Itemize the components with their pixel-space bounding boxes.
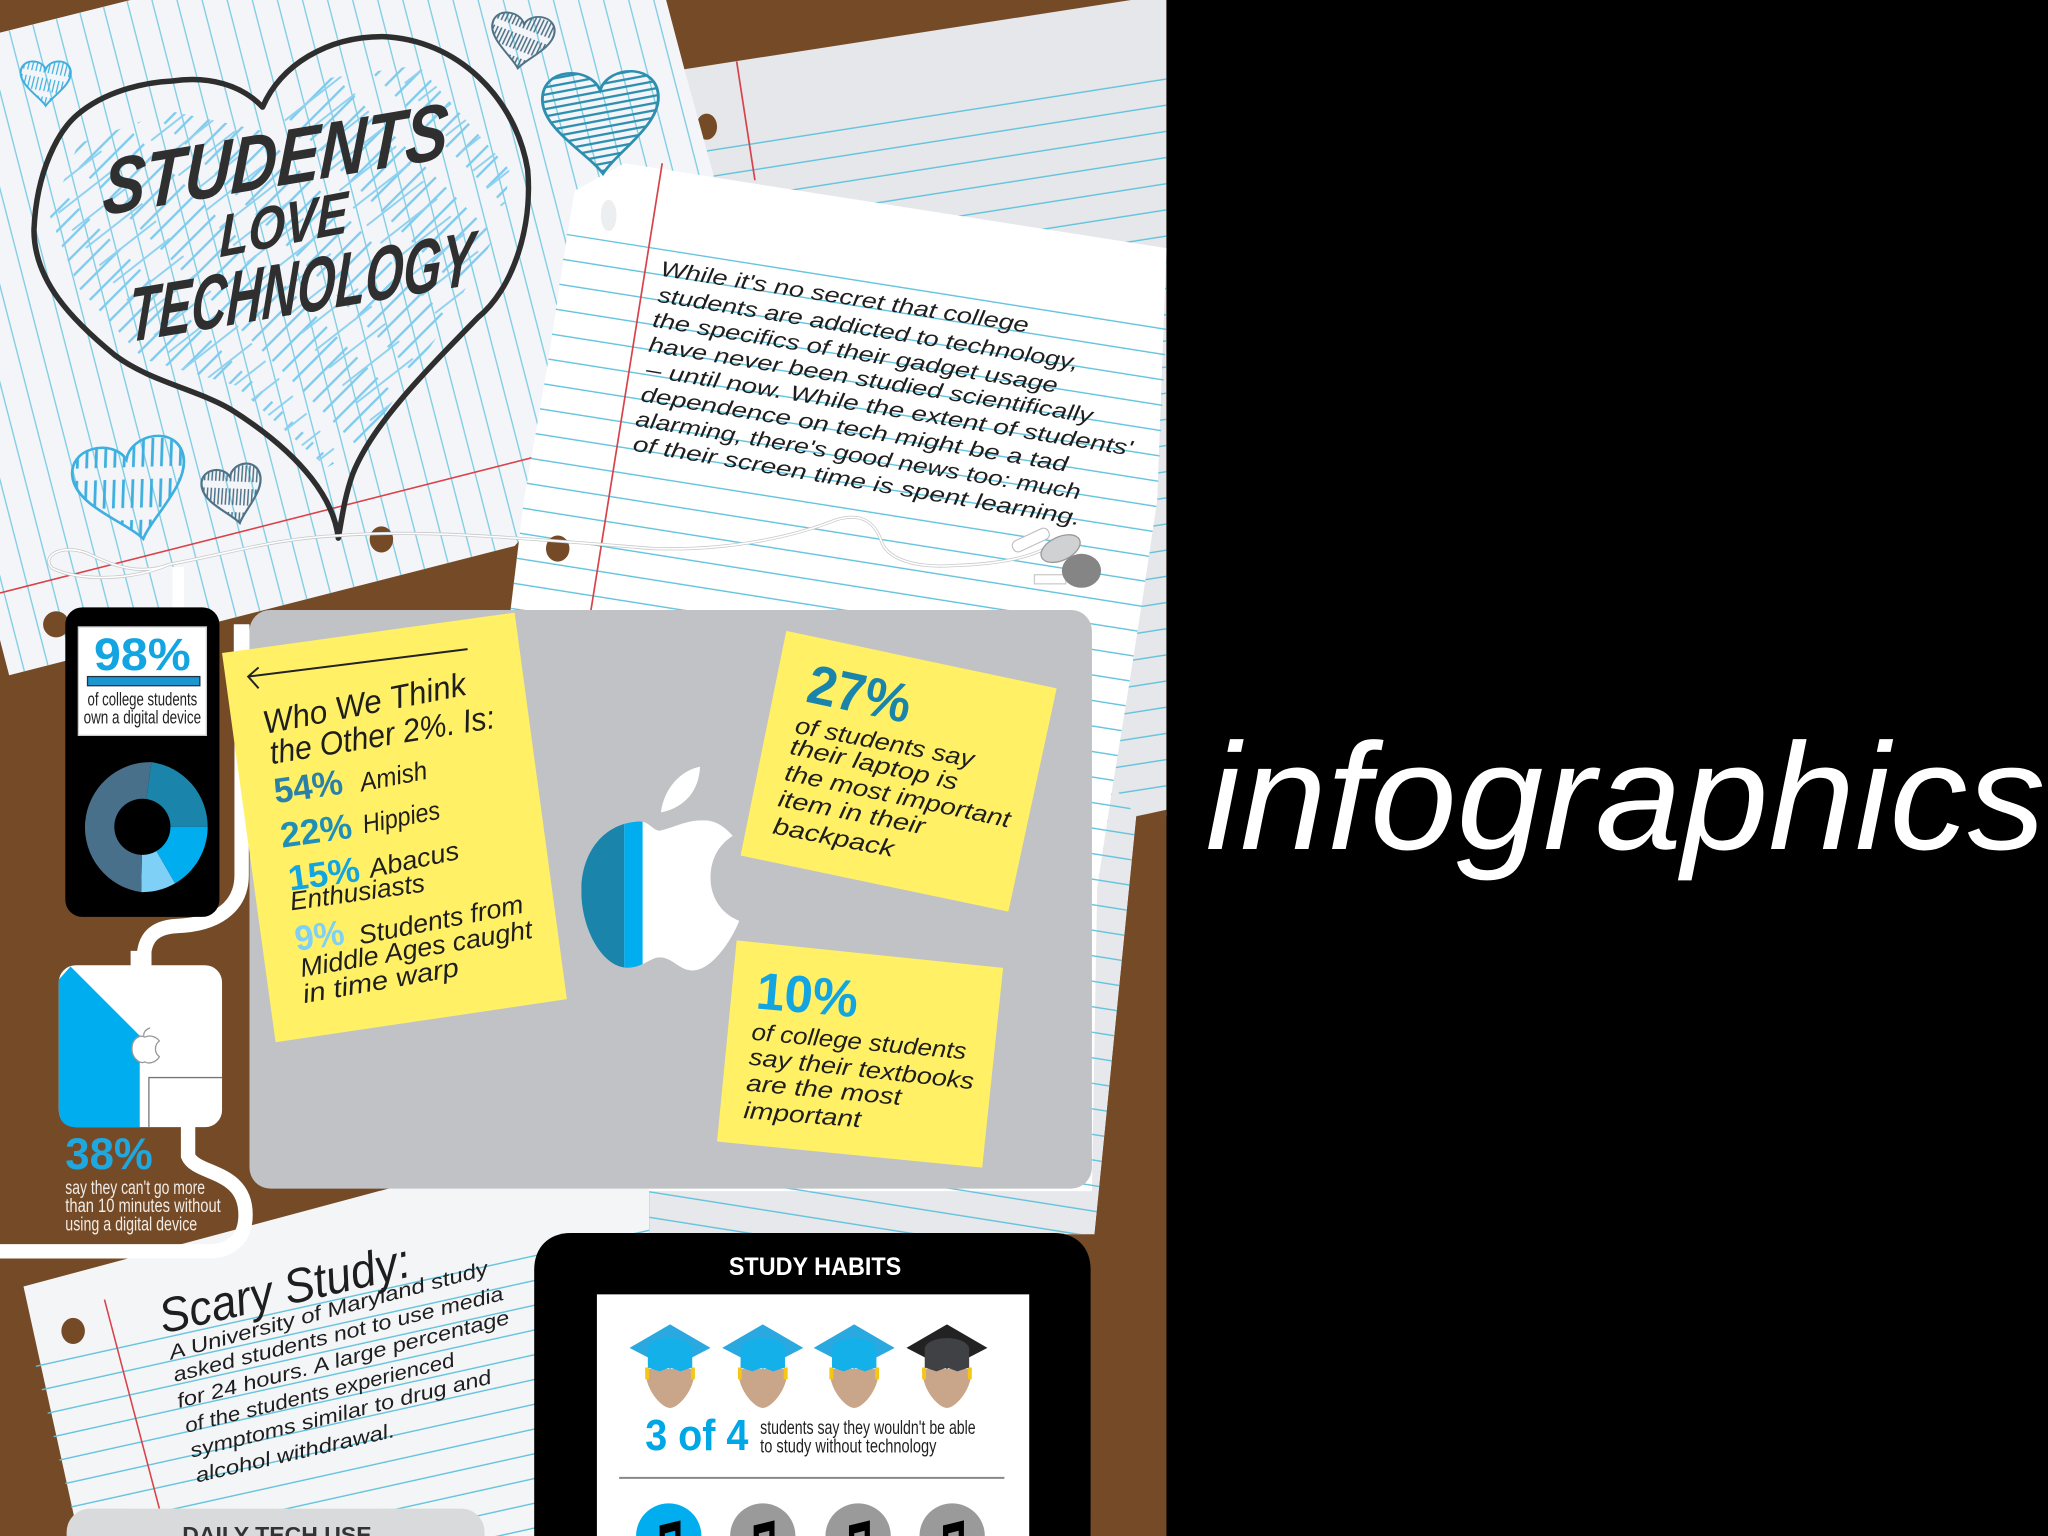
sticky note: 10 percent	[717, 940, 1003, 1168]
icon: small slate heart top	[487, 11, 556, 73]
charger cable	[0, 624, 246, 1251]
punch hole beside ipod	[43, 611, 69, 637]
ipod screen: 98 percent stat: own a digital device	[84, 707, 201, 728]
sticky note: 10 percent: important	[743, 1097, 864, 1132]
stat: 3 of 4: 3 of 4	[645, 1412, 748, 1460]
sticky note: who we think: Enthusiasts	[288, 868, 427, 916]
sticky note: 10 percent: say their textbooks	[748, 1044, 976, 1094]
icon: graduate 3	[814, 1324, 895, 1408]
divider	[619, 1477, 1004, 1479]
icon: music note 4	[920, 1503, 985, 1536]
sticky note: who we think: Amish	[355, 755, 430, 798]
panel: laptop lid	[249, 610, 1092, 1189]
icon: large teal heart	[542, 70, 661, 176]
intro text block: dependence on tech might be a tad	[639, 381, 1071, 477]
ipod screen: 98 percent stat: of college students	[88, 688, 197, 709]
sticky note: 10 percent: are the most	[745, 1070, 904, 1110]
icon: graduate 1	[630, 1324, 711, 1408]
intro text block: have never been studied scientifically	[647, 332, 1096, 428]
intro text block: alarming, there's good news too: much	[634, 406, 1083, 504]
sticky note: who we think: Hippies	[360, 795, 442, 839]
sticky note: who we think: Middle Ages caught	[298, 914, 536, 983]
panel: heart notebook sheet	[0, 0, 731, 675]
scary study text: symptoms similar to drug and	[188, 1367, 495, 1462]
sticky note: who we think: Students from	[356, 889, 526, 950]
scary study text: of the students experienced	[183, 1350, 458, 1438]
icon: music note 3	[825, 1503, 891, 1536]
brown strip right of laptop	[1091, 810, 1166, 1536]
icon: blue heart lower left	[68, 431, 198, 550]
sticky note: who we think: 15%	[286, 850, 362, 899]
stat: 3 of 4	[645, 1412, 976, 1460]
sticky note: 27 percent: of students say	[793, 712, 978, 773]
icon: apple logo bar chart	[581, 766, 739, 970]
icon: music note 1	[636, 1503, 701, 1536]
icon: music note 2	[730, 1503, 795, 1536]
stat: 38 percent	[65, 1130, 221, 1235]
stat: 3 of 4: to study without technology	[760, 1436, 937, 1457]
icon: slate heart lower	[199, 461, 269, 529]
tablet heading: STUDY HABITS	[729, 1254, 901, 1281]
title: TECHNOLOGY	[127, 215, 480, 359]
corkboard brown background	[0, 0, 1166, 1536]
sticky note: 27 percent: their laptop is	[788, 733, 961, 795]
cable over laptop edge	[234, 624, 249, 664]
panel: heart scribble hatching	[50, 65, 509, 468]
sticky note: who we think: 22%	[278, 807, 354, 856]
tablet screen	[597, 1294, 1029, 1536]
scary study text: A University of Maryland study	[166, 1257, 493, 1365]
stat: 38 percent: say they can't go more	[65, 1178, 205, 1199]
title	[101, 85, 480, 359]
title: LOVE	[219, 177, 350, 270]
sticky note: who we think: the Other 2%. Is:	[267, 698, 497, 771]
stat: 38 percent: than 10 minutes without	[65, 1196, 221, 1217]
stat: 3 of 4: students say they wouldn't be able	[760, 1418, 976, 1439]
ipod screen: 98 percent stat: 98%	[94, 629, 191, 680]
icon: graduate 2	[722, 1324, 803, 1408]
big heart outline	[34, 37, 528, 538]
icon: graduate 4	[906, 1324, 987, 1408]
sticky note: who we think: in time warp	[300, 952, 461, 1009]
icon: earbuds and cord	[49, 517, 1101, 609]
sticky note: 10 percent: of college students	[751, 1019, 968, 1064]
scary study text	[166, 1257, 512, 1487]
sticky note: who we think: 54%	[271, 763, 345, 811]
panel: intro note sheet	[511, 163, 1166, 1191]
stat: 38 percent: 38%	[65, 1130, 153, 1179]
panel: grey lower layer of intro sheet	[649, 597, 1143, 1234]
intro text block	[631, 256, 1136, 530]
sticky note: who we think: Abacus	[364, 835, 462, 884]
sticky note: who we think: Who We Think	[259, 665, 471, 741]
panel: scary study sheet	[24, 1119, 649, 1536]
slide word: infographics: infographics	[1206, 713, 2045, 882]
scary study heading: Scary Study:	[154, 1234, 415, 1344]
scary study text: asked students not to use media	[171, 1283, 506, 1387]
donut chart click wheel	[85, 762, 208, 892]
sticky note: who we think	[222, 613, 567, 1042]
panel: ipod	[65, 607, 219, 917]
sticky note: 27 percent: backpack	[771, 813, 898, 862]
icon: small blue heart top left	[21, 61, 71, 106]
panel: study habits tablet	[534, 1233, 1091, 1536]
intro text block: the specifics of their gadget usage	[651, 307, 1060, 398]
intro text block: of their screen time is spent learning.	[631, 431, 1082, 530]
ipod screen: 98 percent stat	[78, 627, 206, 735]
scary study text: for 24 hours. A large percentage	[175, 1307, 512, 1413]
sticky note: 27 percent	[741, 631, 1057, 912]
panel: daily tech use tab	[67, 1509, 485, 1536]
intro text block: students are addicted to technology,	[656, 282, 1080, 375]
intro text block: – until now. While the extent of students'	[643, 356, 1136, 461]
sticky note: 10 percent: 10%	[754, 963, 860, 1029]
sticky note: 27 percent: the most important	[783, 759, 1015, 833]
icon: power adapter	[59, 951, 222, 1127]
stat: 38 percent: using a digital device	[65, 1214, 197, 1235]
panel: back sheet of paper top right	[653, 0, 1166, 914]
scary study text: alcohol withdrawal.	[193, 1420, 397, 1487]
sticky note: 27 percent: 27%	[802, 652, 917, 735]
intro text block: While it's no secret that college	[659, 256, 1031, 337]
sticky note: who we think: 9%	[292, 913, 347, 959]
sticky note: 27 percent: item in their	[776, 785, 929, 839]
title: STUDENTS	[101, 85, 450, 233]
